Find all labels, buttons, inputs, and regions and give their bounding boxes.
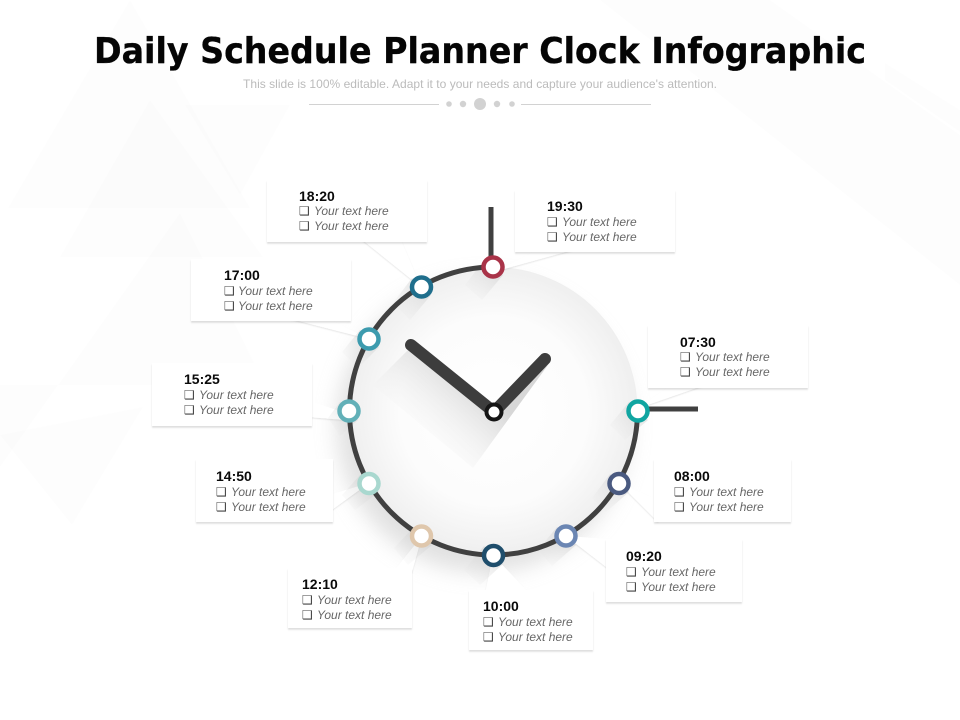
card: 15:25: Your text here — [199, 403, 274, 417]
card: 17:00: ❑ — [224, 299, 235, 313]
node: 18:20 — [412, 278, 431, 296]
card: 07:30 — [636, 325, 808, 409]
card: 17:00: 17:00 — [224, 267, 260, 283]
node: 10:00 — [484, 546, 503, 565]
card: 17:00: ❑ — [224, 284, 235, 298]
card: 17:00: Your text here — [238, 299, 313, 313]
tick: right marker — [645, 406, 698, 412]
card: 08:00: Your text here — [689, 500, 764, 514]
card: 14:50: ❑ — [216, 500, 227, 514]
card: 18:20: 18:20 — [299, 188, 335, 204]
clock hands long shadow — [373, 350, 548, 468]
card: 08:00 — [619, 459, 791, 522]
card: 15:25: ❑ — [184, 403, 195, 417]
card: 12:10 — [288, 536, 422, 628]
card: 18:20 — [267, 180, 427, 287]
card: 09:20: 09:20 — [626, 548, 662, 564]
background triangles — [0, 0, 960, 525]
card: 10:00: 10:00 — [483, 598, 519, 614]
card: 19:30: ❑ — [547, 230, 558, 244]
card: 15:25 — [152, 363, 345, 426]
card: 07:30: Your text here — [695, 350, 770, 364]
card: 07:30: Your text here — [695, 365, 770, 379]
card: 07:30: ❑ — [680, 365, 691, 379]
card: 14:50: Your text here — [231, 485, 306, 499]
node: 15:25 — [340, 402, 358, 420]
node long shadows — [328, 260, 648, 585]
card: 10:00: Your text here — [498, 615, 573, 629]
card: 09:20 — [566, 536, 742, 602]
subtitle: This slide is 100% editable. Adapt it to your needs and capture your audience's attention. — [243, 77, 717, 91]
card: 17:00: Your text here — [238, 284, 313, 298]
card: 17:00 — [191, 259, 369, 339]
card: 09:20: Your text here — [641, 565, 716, 579]
card: 12:10: 12:10 — [302, 576, 338, 592]
card: 18:20: ❑ — [299, 204, 310, 218]
clock hands — [411, 345, 545, 412]
clock face — [350, 267, 638, 555]
card: 15:25: Your text here — [199, 388, 274, 402]
card: 09:20: ❑ — [626, 580, 637, 594]
card: 14:50: Your text here — [231, 500, 306, 514]
node: 19:30 — [484, 258, 502, 276]
card: 19:30 — [497, 190, 675, 271]
card: 12:10: ❑ — [302, 608, 313, 622]
card: 10:00: Your text here — [498, 630, 573, 644]
card: 19:30: 19:30 — [547, 198, 583, 214]
title: Daily Schedule Planner Clock Infographic — [94, 31, 866, 72]
clock centre pin — [484, 402, 504, 422]
card: 19:30: Your text here — [562, 230, 637, 244]
node: 09:20 — [556, 526, 576, 546]
card: 07:30: 07:30 — [680, 334, 716, 350]
card: 14:50: 14:50 — [216, 468, 252, 484]
clock face shadow — [337, 280, 629, 572]
node: 12:10 — [412, 526, 431, 546]
tick: top marker — [488, 207, 494, 262]
divider with dots — [309, 98, 651, 110]
card: 10:00 — [469, 555, 593, 650]
card: 18:20: Your text here — [314, 204, 389, 218]
card: 18:20: Your text here — [314, 219, 389, 233]
card: 18:20: ❑ — [299, 219, 310, 233]
card: 08:00: ❑ — [674, 500, 685, 514]
card: 12:10: ❑ — [302, 593, 313, 607]
node: 17:00 — [360, 330, 378, 348]
card: 19:30: ❑ — [547, 215, 558, 229]
card: 12:10: Your text here — [317, 608, 392, 622]
clock ring (three-quarter arc) — [350, 267, 638, 555]
card: 10:00: ❑ — [483, 615, 494, 629]
card: 19:30: Your text here — [562, 215, 637, 229]
card: 15:25: ❑ — [184, 388, 195, 402]
card: 15:25: 15:25 — [184, 371, 220, 387]
card: 08:00: 08:00 — [674, 468, 710, 484]
card: 10:00: ❑ — [483, 630, 494, 644]
timeline nodes — [340, 258, 648, 565]
card: 07:30: ❑ — [680, 350, 691, 364]
card: 14:50 — [196, 459, 369, 522]
node: 14:50 — [360, 474, 378, 493]
node: 08:00 — [610, 474, 628, 493]
card: 09:20: Your text here — [641, 580, 716, 594]
node: 07:30 — [628, 402, 648, 420]
card: 09:20: ❑ — [626, 565, 637, 579]
card: 08:00: Your text here — [689, 485, 764, 499]
card: 12:10: Your text here — [317, 593, 392, 607]
card: 08:00: ❑ — [674, 485, 685, 499]
card: 14:50: ❑ — [216, 485, 227, 499]
